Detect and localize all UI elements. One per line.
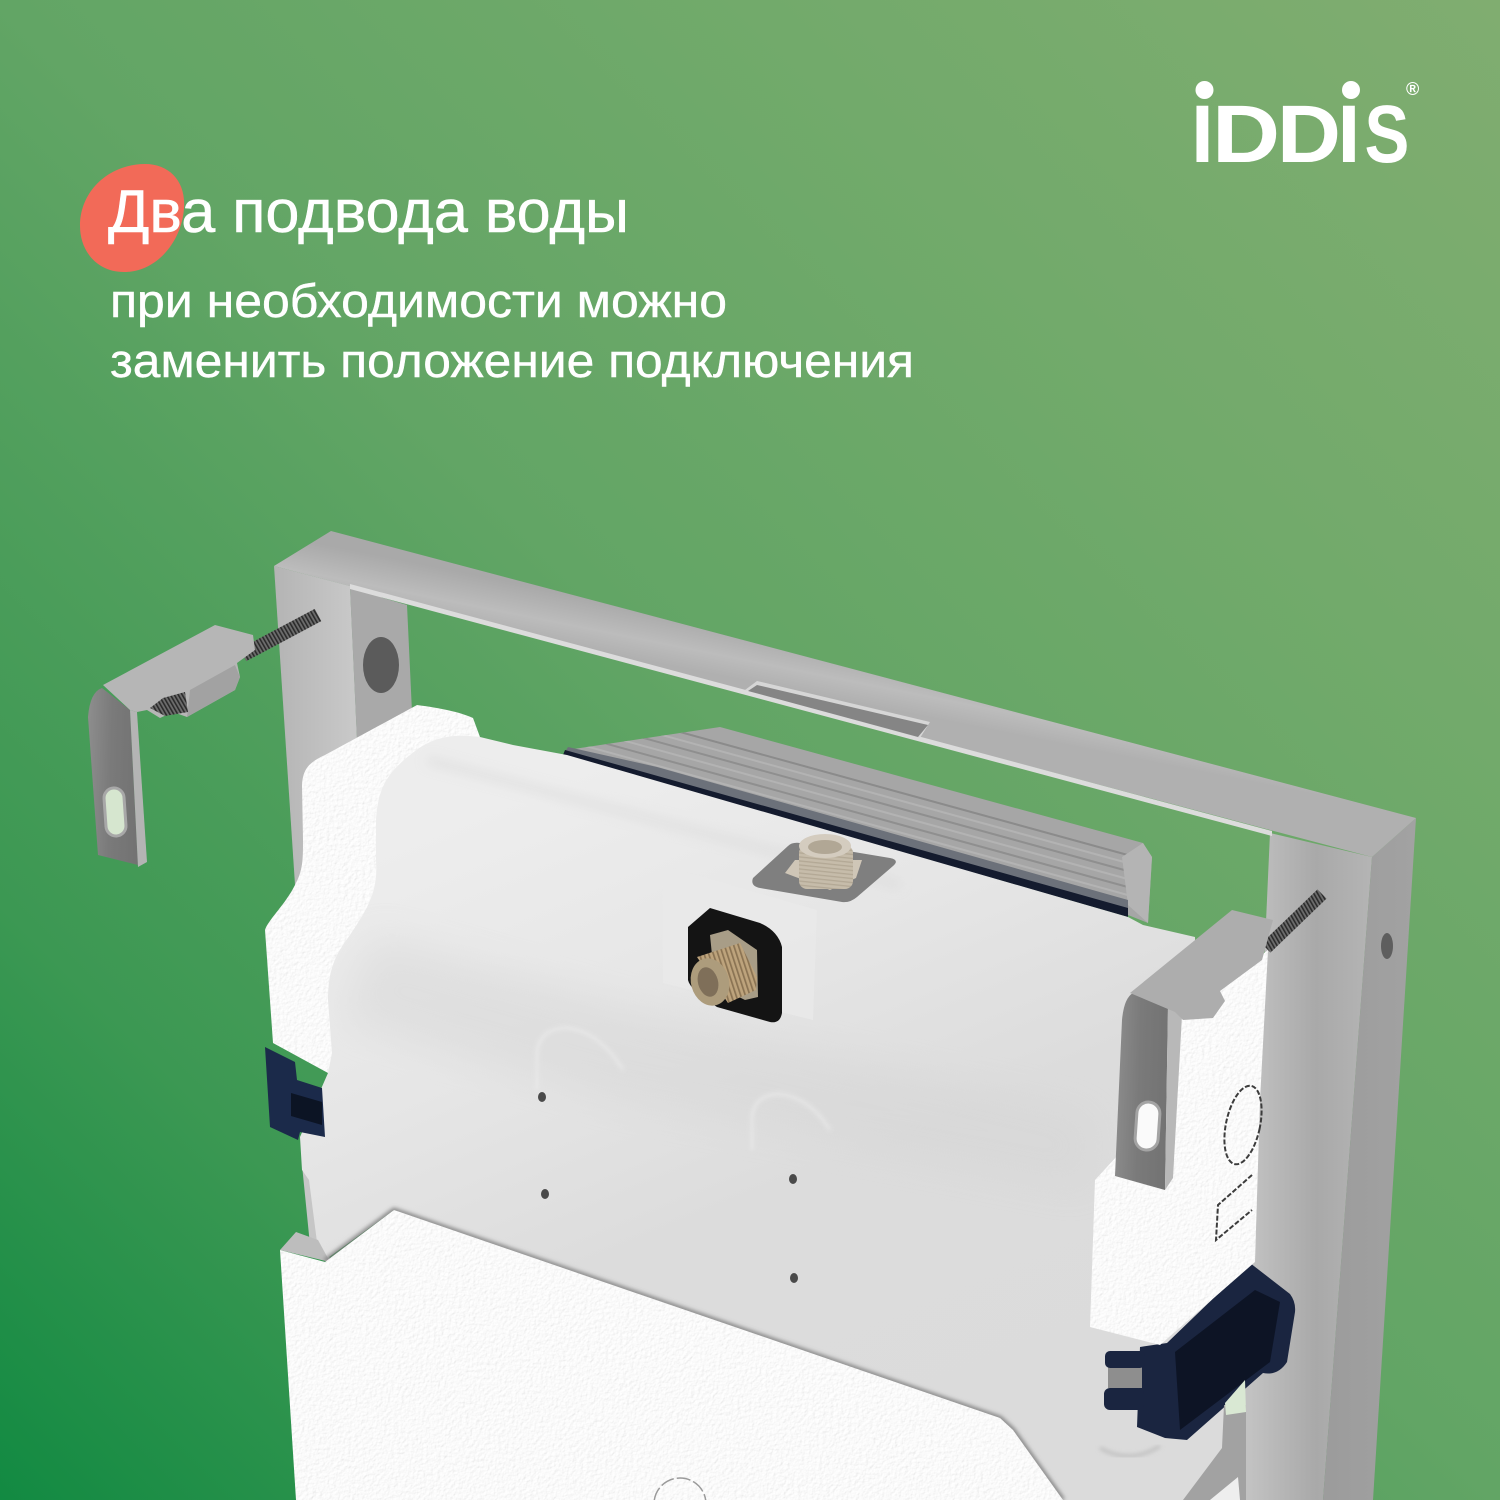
lower tank shadow [1100,1446,1160,1456]
title: Два подвода воды [108,178,629,245]
logo: IDDIS: I [1338,89,1360,180]
tank raised bumps [537,1028,830,1150]
right threaded bolt [1266,894,1322,948]
right foam insulation [1090,950,1268,1345]
logo: IDDIS: I [1191,89,1214,180]
subtitle text: заменить положение подключения [110,334,914,387]
bottom right foam [1183,1380,1246,1500]
tank body [300,725,1227,1500]
left threaded bolt [243,615,318,655]
tank screw holes [538,1092,798,1283]
logo: IDDIS: ® [1406,79,1419,99]
logo: IDDIS: S [1364,88,1409,179]
upper water inlet [662,834,896,1020]
upper-left foam insulation [265,705,480,1073]
lower foam panel [280,1210,1063,1500]
frame: left column [274,566,412,1262]
logo: IDDIS: D [1212,88,1280,180]
left clip [265,1047,325,1140]
logo: IDDIS [1191,79,1419,180]
left bracket [88,615,318,867]
right bracket [1115,894,1322,1190]
bar notch [745,681,930,738]
subtitle text: при необходимости можно [110,274,727,327]
accent blob [80,164,184,272]
frame: top bar [274,531,1416,857]
lower water inlet [685,908,782,1022]
subtitle text [110,274,914,387]
foam stamp marks [1216,1082,1268,1240]
product: installation frame [88,531,1416,1500]
logo: IDDIS: D [1277,89,1341,180]
ribbed back panel [563,727,1152,923]
right clip [1104,1263,1295,1440]
frame: right column [1240,818,1416,1500]
